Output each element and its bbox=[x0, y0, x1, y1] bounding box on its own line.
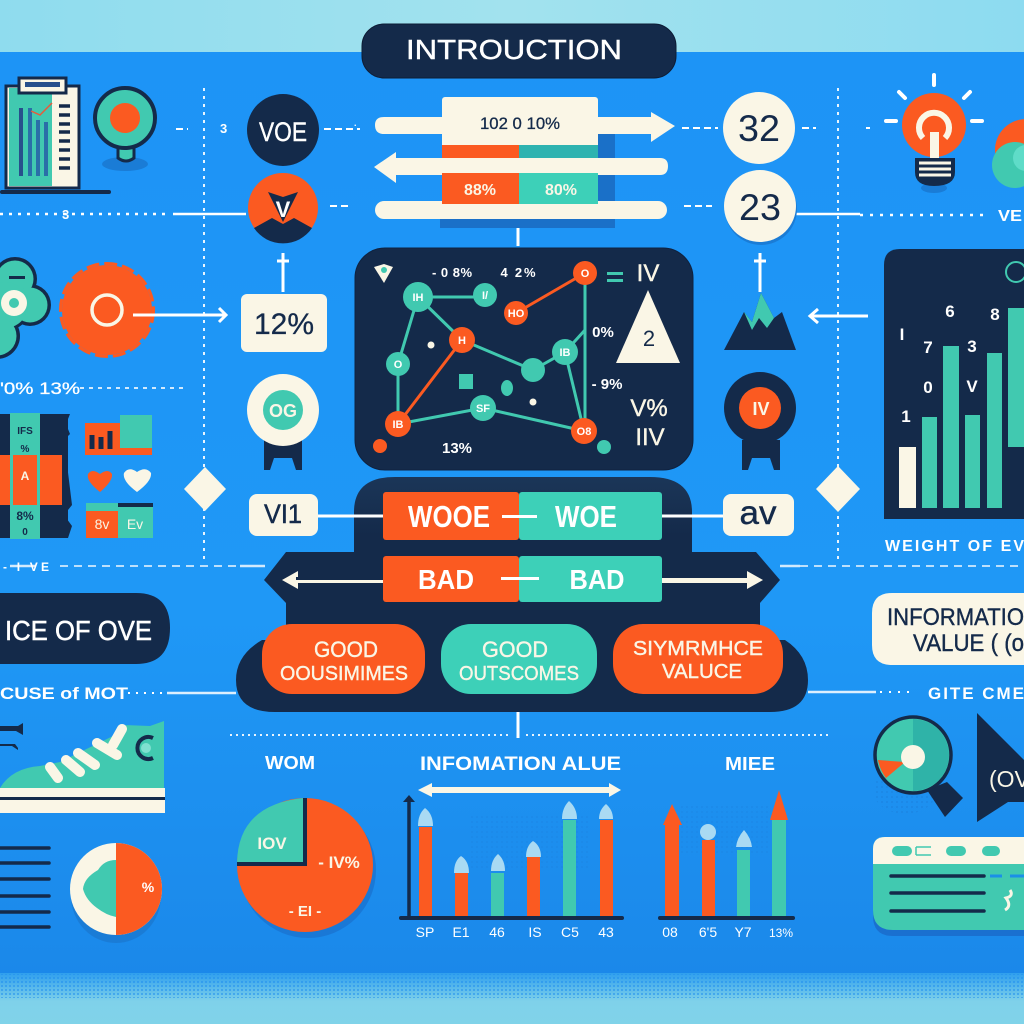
panel: weight of evidence chart bbox=[884, 249, 1024, 519]
medal: IV bbox=[724, 372, 796, 470]
arrow: chart to centre bbox=[810, 309, 868, 323]
icon: donut badge bbox=[875, 717, 963, 817]
icon: small cards and hearts bbox=[85, 415, 153, 538]
box: VI1: VI1 bbox=[264, 499, 302, 529]
heading: information value: INFOMATION ALUE bbox=[420, 754, 621, 775]
text: tick labels: . bbox=[668, 118, 671, 128]
icon: small cards and hearts: Ev bbox=[127, 516, 143, 532]
panel: network graph: IH bbox=[412, 292, 424, 304]
panel: network graph: SF bbox=[476, 403, 490, 415]
pill: good outcomes teal bbox=[441, 624, 597, 694]
circle: 32: 32 bbox=[738, 108, 780, 149]
row: WOE: WOOE bbox=[408, 499, 490, 534]
arrow: double range bbox=[418, 783, 621, 797]
arrow: BAD right bbox=[662, 571, 763, 589]
circle: 23 bbox=[724, 170, 797, 245]
text: tick labels bbox=[62, 118, 671, 222]
arrow: up left bbox=[277, 253, 289, 292]
card: teal list bbox=[873, 837, 1024, 936]
icon: list lines bbox=[0, 848, 49, 927]
panel: network graph: IB bbox=[560, 347, 571, 359]
icon: target pin bbox=[95, 88, 155, 171]
icon: mountain bbox=[724, 293, 796, 350]
medal: OG bbox=[247, 374, 319, 470]
pill: good outcomes orange: OOUSIMIMES bbox=[280, 663, 408, 685]
arrow: up right bbox=[754, 253, 766, 292]
icon: clipboard chart bbox=[0, 78, 111, 194]
panel: network graph: O bbox=[394, 359, 403, 371]
pill: good outcomes orange bbox=[262, 624, 425, 694]
pill: good outcomes orange: GOOD bbox=[314, 637, 378, 662]
box: VI1 bbox=[249, 494, 318, 536]
icon: light bulb bbox=[886, 75, 982, 193]
circle: V bbox=[248, 173, 318, 243]
pill: symmetric value bbox=[613, 624, 783, 694]
icon: ribbon banner: 0 bbox=[22, 527, 28, 538]
data table with arrows bbox=[374, 97, 675, 228]
arrow: gear to 12% bbox=[133, 308, 226, 322]
circle: 23: 23 bbox=[739, 187, 781, 228]
icon: overlapping circles bbox=[992, 119, 1024, 188]
pie: WOM: - IV% bbox=[318, 853, 360, 872]
panel: network graph: V% bbox=[630, 395, 668, 422]
panel: weight of evidence chart: 1 bbox=[901, 407, 911, 426]
panel: network graph: 2 bbox=[643, 326, 655, 351]
arrow: BAD left bbox=[282, 571, 383, 589]
icon: teal cloud bbox=[0, 257, 51, 359]
panel: network graph: O bbox=[581, 268, 590, 280]
panel: network graph: O8 bbox=[577, 426, 591, 438]
title bbox=[362, 24, 676, 78]
bar chart: information value bbox=[399, 795, 624, 940]
panel: weight of evidence chart: 8 bbox=[990, 305, 1000, 324]
text: cuse of mot: CUSE of MOT bbox=[0, 684, 129, 703]
box: av: av bbox=[740, 494, 777, 531]
panel: weight of evidence chart: 7 bbox=[923, 338, 933, 357]
text: weight of evidence: WEIGHT OF EV bbox=[885, 538, 1024, 555]
data table with arrows: 80% bbox=[545, 182, 577, 199]
data table with arrows: 88% bbox=[464, 182, 496, 199]
bar chart: MIEE: 08 bbox=[662, 924, 678, 940]
bar chart: information value: E1 bbox=[452, 924, 470, 940]
text: side label: - I VE bbox=[3, 560, 49, 574]
row: BAD: BAD bbox=[570, 564, 624, 595]
bar chart: information value: C5 bbox=[561, 924, 579, 940]
bar chart: information value: IS bbox=[528, 924, 542, 940]
box: av bbox=[723, 494, 794, 536]
panel: network graph: - 9% bbox=[592, 376, 622, 393]
heading: WOM: WOM bbox=[265, 753, 315, 773]
medal: OG: OG bbox=[269, 401, 297, 421]
diamond: left bbox=[184, 467, 226, 511]
panel: network graph: 4 2% bbox=[500, 265, 536, 280]
panel: hierarchy base bbox=[236, 477, 808, 712]
panel: weight of evidence chart: 6 bbox=[945, 302, 955, 321]
bar chart: information value: SP bbox=[416, 924, 434, 940]
bar chart: MIEE: Y7 bbox=[734, 924, 752, 940]
box: 12%: 12% bbox=[254, 308, 314, 341]
panel: network graph: IB bbox=[392, 419, 404, 431]
text: tick labels: 3 bbox=[62, 207, 69, 222]
panel: network graph bbox=[355, 248, 693, 470]
panel: network graph: I/ bbox=[482, 290, 488, 302]
bar chart: information value: 43 bbox=[598, 924, 614, 940]
data table with arrows: 102 0 10% bbox=[480, 114, 560, 133]
icon: small cards and hearts: 8v bbox=[95, 516, 109, 532]
circle: VOE: VOE bbox=[259, 117, 307, 147]
icon: ribbon banner: % bbox=[21, 444, 30, 455]
pill: symmetric value: VALUCE bbox=[662, 661, 742, 683]
icon: ribbon banner: A bbox=[21, 469, 30, 483]
icon: ribbon banner: IFS bbox=[17, 426, 33, 437]
panel: weight of evidence chart: I bbox=[900, 325, 904, 344]
circle: 32 bbox=[723, 92, 795, 164]
circle: V: V bbox=[276, 197, 291, 222]
bar chart: information value: 46 bbox=[489, 924, 505, 940]
heading pill: notice of ove bbox=[0, 593, 170, 664]
pie: small: % bbox=[142, 879, 155, 895]
pill: good outcomes teal: OUTSCOMES bbox=[459, 663, 579, 685]
panel: weight of evidence chart: V bbox=[966, 377, 978, 396]
row: BAD: BAD bbox=[418, 564, 474, 595]
text: tick labels: . bbox=[354, 118, 357, 128]
text: VE label: VE bbox=[998, 208, 1022, 225]
bar chart: MIEE bbox=[658, 790, 795, 940]
pie: WOM: IOV bbox=[257, 834, 287, 853]
row: WOE bbox=[383, 492, 662, 540]
panel: network graph: HO bbox=[508, 308, 525, 320]
panel: network graph: IV bbox=[637, 260, 659, 287]
panel: network graph: IIV bbox=[635, 424, 665, 451]
medal: IV: IV bbox=[752, 399, 770, 419]
circle: VOE bbox=[247, 94, 319, 166]
panel: weight of evidence chart: 3 bbox=[967, 337, 977, 356]
panel: network graph: - 0 8% bbox=[432, 265, 472, 280]
heading: MIEE: MIEE bbox=[725, 754, 775, 774]
row: WOE: WOE bbox=[555, 499, 617, 534]
pill: good outcomes teal: GOOD bbox=[482, 637, 548, 662]
icon: ribbon banner: 8% bbox=[16, 509, 34, 523]
title: INTROUCTION bbox=[406, 34, 622, 65]
icon: dark callout bbox=[977, 713, 1024, 822]
diamond: right bbox=[816, 466, 860, 512]
panel: network graph: 0% bbox=[592, 324, 614, 341]
icon: ribbon banner bbox=[0, 413, 72, 539]
icon: orange gear bbox=[60, 264, 154, 356]
bar chart: MIEE: 6'5 bbox=[699, 924, 717, 940]
card: information value bbox=[872, 593, 1024, 665]
text: tick labels: 3 bbox=[220, 121, 227, 136]
text: percent labels: '0% 13% bbox=[0, 379, 80, 398]
box: 12% bbox=[241, 294, 327, 352]
icon: sneaker bbox=[0, 721, 165, 813]
pie: WOM: - EI - bbox=[289, 903, 321, 920]
heading pill: notice of ove: ICE OF OVE bbox=[5, 615, 152, 646]
panel: weight of evidence chart: 0 bbox=[923, 378, 933, 397]
pill: symmetric value: SIYMRMHCE bbox=[633, 638, 763, 660]
panel: network graph: 13% bbox=[442, 440, 472, 457]
text: gite cme: GITE CME bbox=[928, 684, 1024, 703]
pie: small bbox=[70, 843, 162, 943]
row: BAD bbox=[383, 556, 662, 602]
panel: network graph: H bbox=[458, 335, 466, 347]
bar chart: MIEE: 13% bbox=[769, 926, 793, 940]
pie: WOM bbox=[237, 798, 376, 938]
